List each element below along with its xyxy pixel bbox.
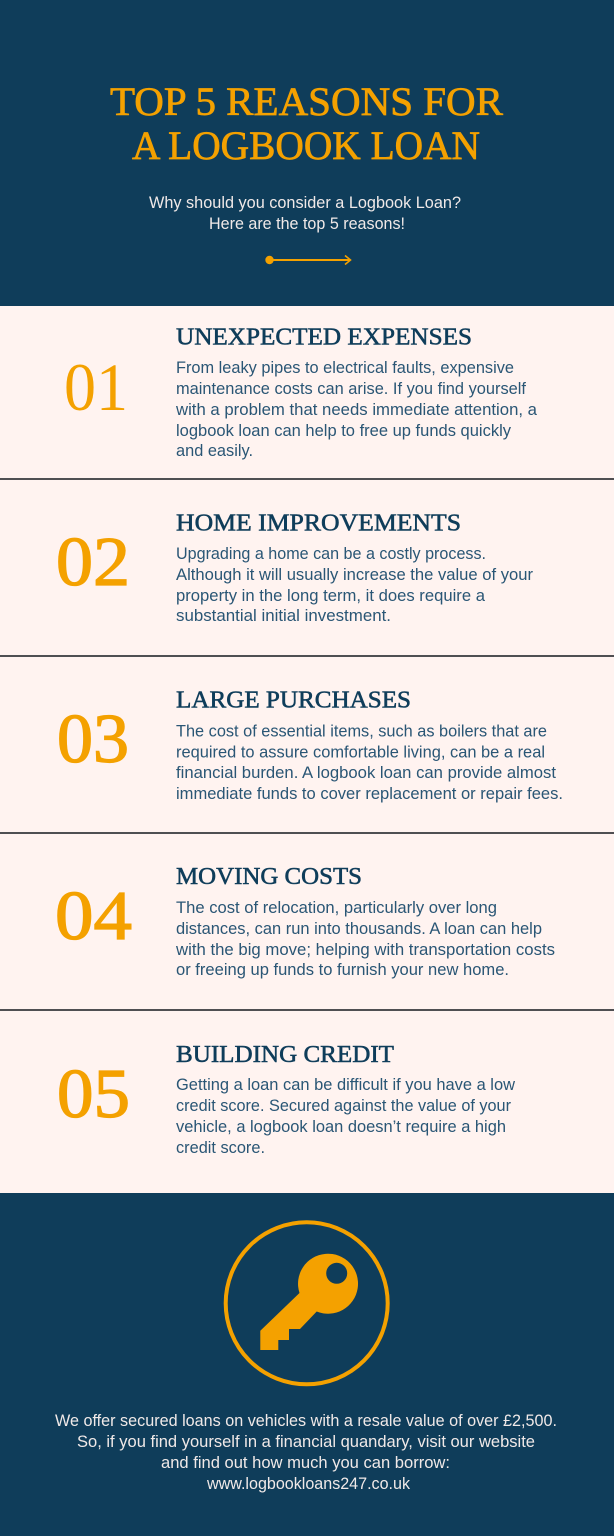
subtitle: Here are the top 5 reasons! — [209, 215, 405, 233]
text block: reason 2: Although it will usually increase the value of your — [176, 566, 533, 584]
text block: reason 4: with the big move; helping with transportation costs — [175, 941, 555, 959]
text block: reason 3: financial burden. A logbook loan can provide almost — [176, 764, 556, 782]
footer panel — [0, 1193, 614, 1536]
heading: moving costs: MOVING COSTS — [176, 864, 362, 890]
text block: reason 1: maintenance costs can arise. If you find yourself — [176, 380, 526, 398]
text block: reason 5: vehicle, a logbook loan doesn’t require a high — [176, 1118, 506, 1136]
text block: reason 3 — [176, 722, 563, 803]
heading: building credit: BUILDING CREDIT — [176, 1042, 394, 1068]
panel: reason 2 — [0, 480, 614, 655]
number 04: 04 — [55, 878, 132, 955]
heading: home improvements: HOME IMPROVEMENTS — [176, 510, 461, 536]
header panel — [0, 0, 614, 306]
footer text: We offer secured loans on vehicles with a resale value of over £2,500. — [55, 1412, 557, 1430]
text block: reason 4 — [175, 899, 555, 979]
number 02: 02 — [56, 524, 130, 601]
text block: reason 4: distances, can run into thousands. A loan can help — [176, 920, 542, 938]
heading: unexpected expenses: UNEXPECTED EXPENSES — [176, 324, 472, 350]
text block: reason 4: or freeing up funds to furnish your new home. — [176, 961, 509, 979]
subtitle — [149, 194, 461, 233]
text block: reason 2 — [176, 545, 533, 625]
text block: reason 3: The cost of essential items, such as boilers that are — [176, 722, 547, 740]
icon: key in circle — [226, 1222, 388, 1384]
text block: reason 5: credit score. — [176, 1139, 265, 1157]
text block: reason 3: immediate funds to cover replacement or repair fees. — [176, 785, 563, 803]
panel: reason 4 — [0, 834, 614, 1009]
number 03: 03 — [57, 701, 129, 778]
text block: reason 5 — [176, 1076, 515, 1157]
text block: reason 5: Getting a loan can be difficult if you have a low — [176, 1076, 515, 1094]
heading: large purchases: LARGE PURCHASES — [176, 688, 411, 714]
subtitle: Why should you consider a Logbook Loan? — [149, 194, 461, 212]
number 05: 05 — [57, 1056, 130, 1133]
footer text: So, if you find yourself in a financial quandary, visit our website — [77, 1433, 535, 1451]
text block: reason 1: with a problem that needs immediate attention, a — [175, 401, 538, 419]
panel: reason 3 — [0, 657, 614, 832]
text block: reason 1: and easily. — [176, 442, 253, 460]
text block: reason 2: Upgrading a home can be a costly process. — [176, 545, 486, 563]
text block: reason 2: substantial initial investment. — [176, 607, 391, 625]
text block: reason 1: logbook loan can help to free up funds quickly — [176, 422, 512, 440]
footer text: www.logbookloans247.co.uk — [206, 1475, 411, 1493]
text block: reason 3: required to assure comfortable living, can be a real — [176, 744, 545, 762]
panel: reason 1 — [0, 306, 614, 479]
footer text: and find out how much you can borrow: — [161, 1454, 450, 1472]
text block: reason 5: credit score. Secured against the value of your — [176, 1097, 511, 1115]
text block: reason 1 — [175, 359, 538, 460]
text block: reason 4: The cost of relocation, particularly over long — [176, 899, 497, 917]
footer text — [55, 1412, 557, 1493]
title: TOP 5 REASONS FOR — [110, 79, 503, 124]
title: A LOGBOOK LOAN — [132, 123, 480, 168]
text block: reason 1: From leaky pipes to electrical faults, expensive — [176, 359, 514, 377]
panel: reason 5 — [0, 1011, 614, 1193]
title — [110, 79, 503, 168]
number 01: 01 — [64, 349, 128, 425]
text block: reason 2: property in the long term, it does require a — [176, 587, 486, 605]
icon: arrow — [265, 256, 350, 264]
